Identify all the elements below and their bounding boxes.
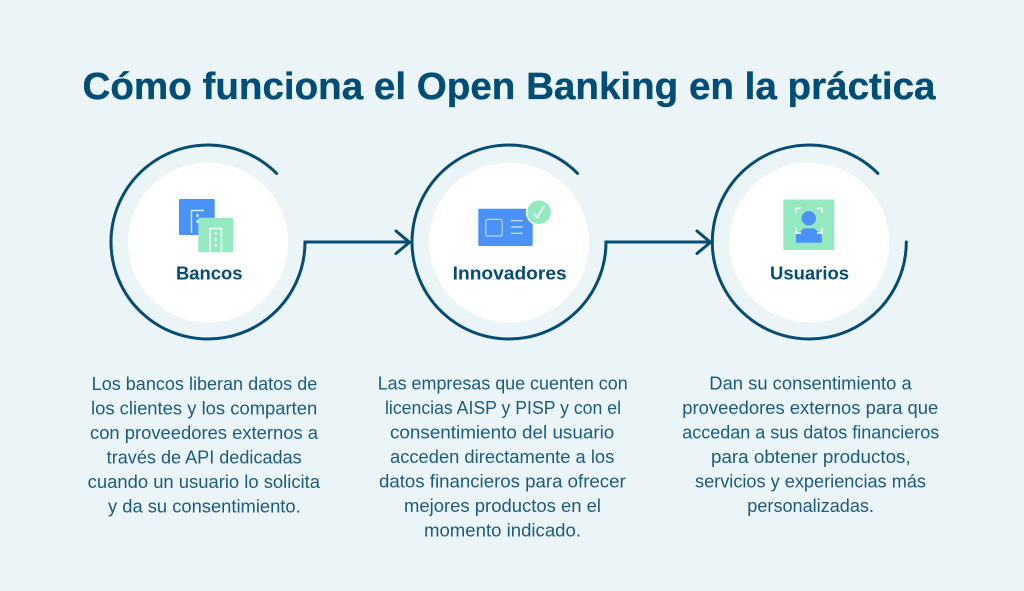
text block: bancos: y da su consentimiento. [108,496,301,516]
ring: usuarios [712,145,906,339]
text block: usuarios [682,374,939,516]
text block: bancos: los clientes y los comparten [91,398,317,418]
icon: licence card with check [478,199,552,246]
panel: innovadores [378,145,710,540]
text block: innovadores: acceden directamente a los [390,447,614,467]
white disc: usuarios [729,162,889,322]
title: Cómo funciona el Open Banking en la práctica [82,66,936,108]
text block: innovadores [378,374,628,540]
text block: innovadores: licencias AISP y PISP y con el [385,398,621,418]
text block: usuarios: proveedores externos para que [682,398,938,418]
text block: innovadores: consentimiento del usuario [390,422,614,442]
text block: usuarios: servicios y experiencias más [695,472,926,492]
panel: bancos [88,145,409,517]
text block: usuarios: accedan a sus datos financieros [682,422,939,442]
text block: innovadores: momento indicado. [424,520,581,540]
text block: usuarios: para obtener productos, [711,447,911,467]
text block: bancos: cuando un usuario lo solicita [88,472,321,492]
text block: bancos: través de API dedicadas [107,448,302,468]
text block: bancos: con proveedores externos a [90,423,319,443]
ring and arrow to usuarios [412,145,710,339]
icon: bank buildings [179,199,233,252]
text block: innovadores: mejores productos en el [404,496,601,516]
white disc: bancos [128,162,288,322]
white disc: innovadores [429,162,589,322]
ring and arrow to innovadores [111,145,410,339]
label: usuarios: Usuarios [770,264,849,284]
label: bancos: Bancos [176,264,242,284]
icon: user face scan [783,200,834,250]
text block: usuarios: personalizadas. [747,496,874,516]
label: innovadores: Innovadores [453,264,567,284]
text block: innovadores: Las empresas que cuenten con [378,374,628,394]
text block: bancos [88,374,321,516]
panel: usuarios [682,145,939,516]
text block: usuarios: Dan su consentimiento a [709,374,913,394]
text block: innovadores: datos financieros para ofrecer [379,472,626,492]
text block: bancos: Los bancos liberan datos de [92,374,317,394]
